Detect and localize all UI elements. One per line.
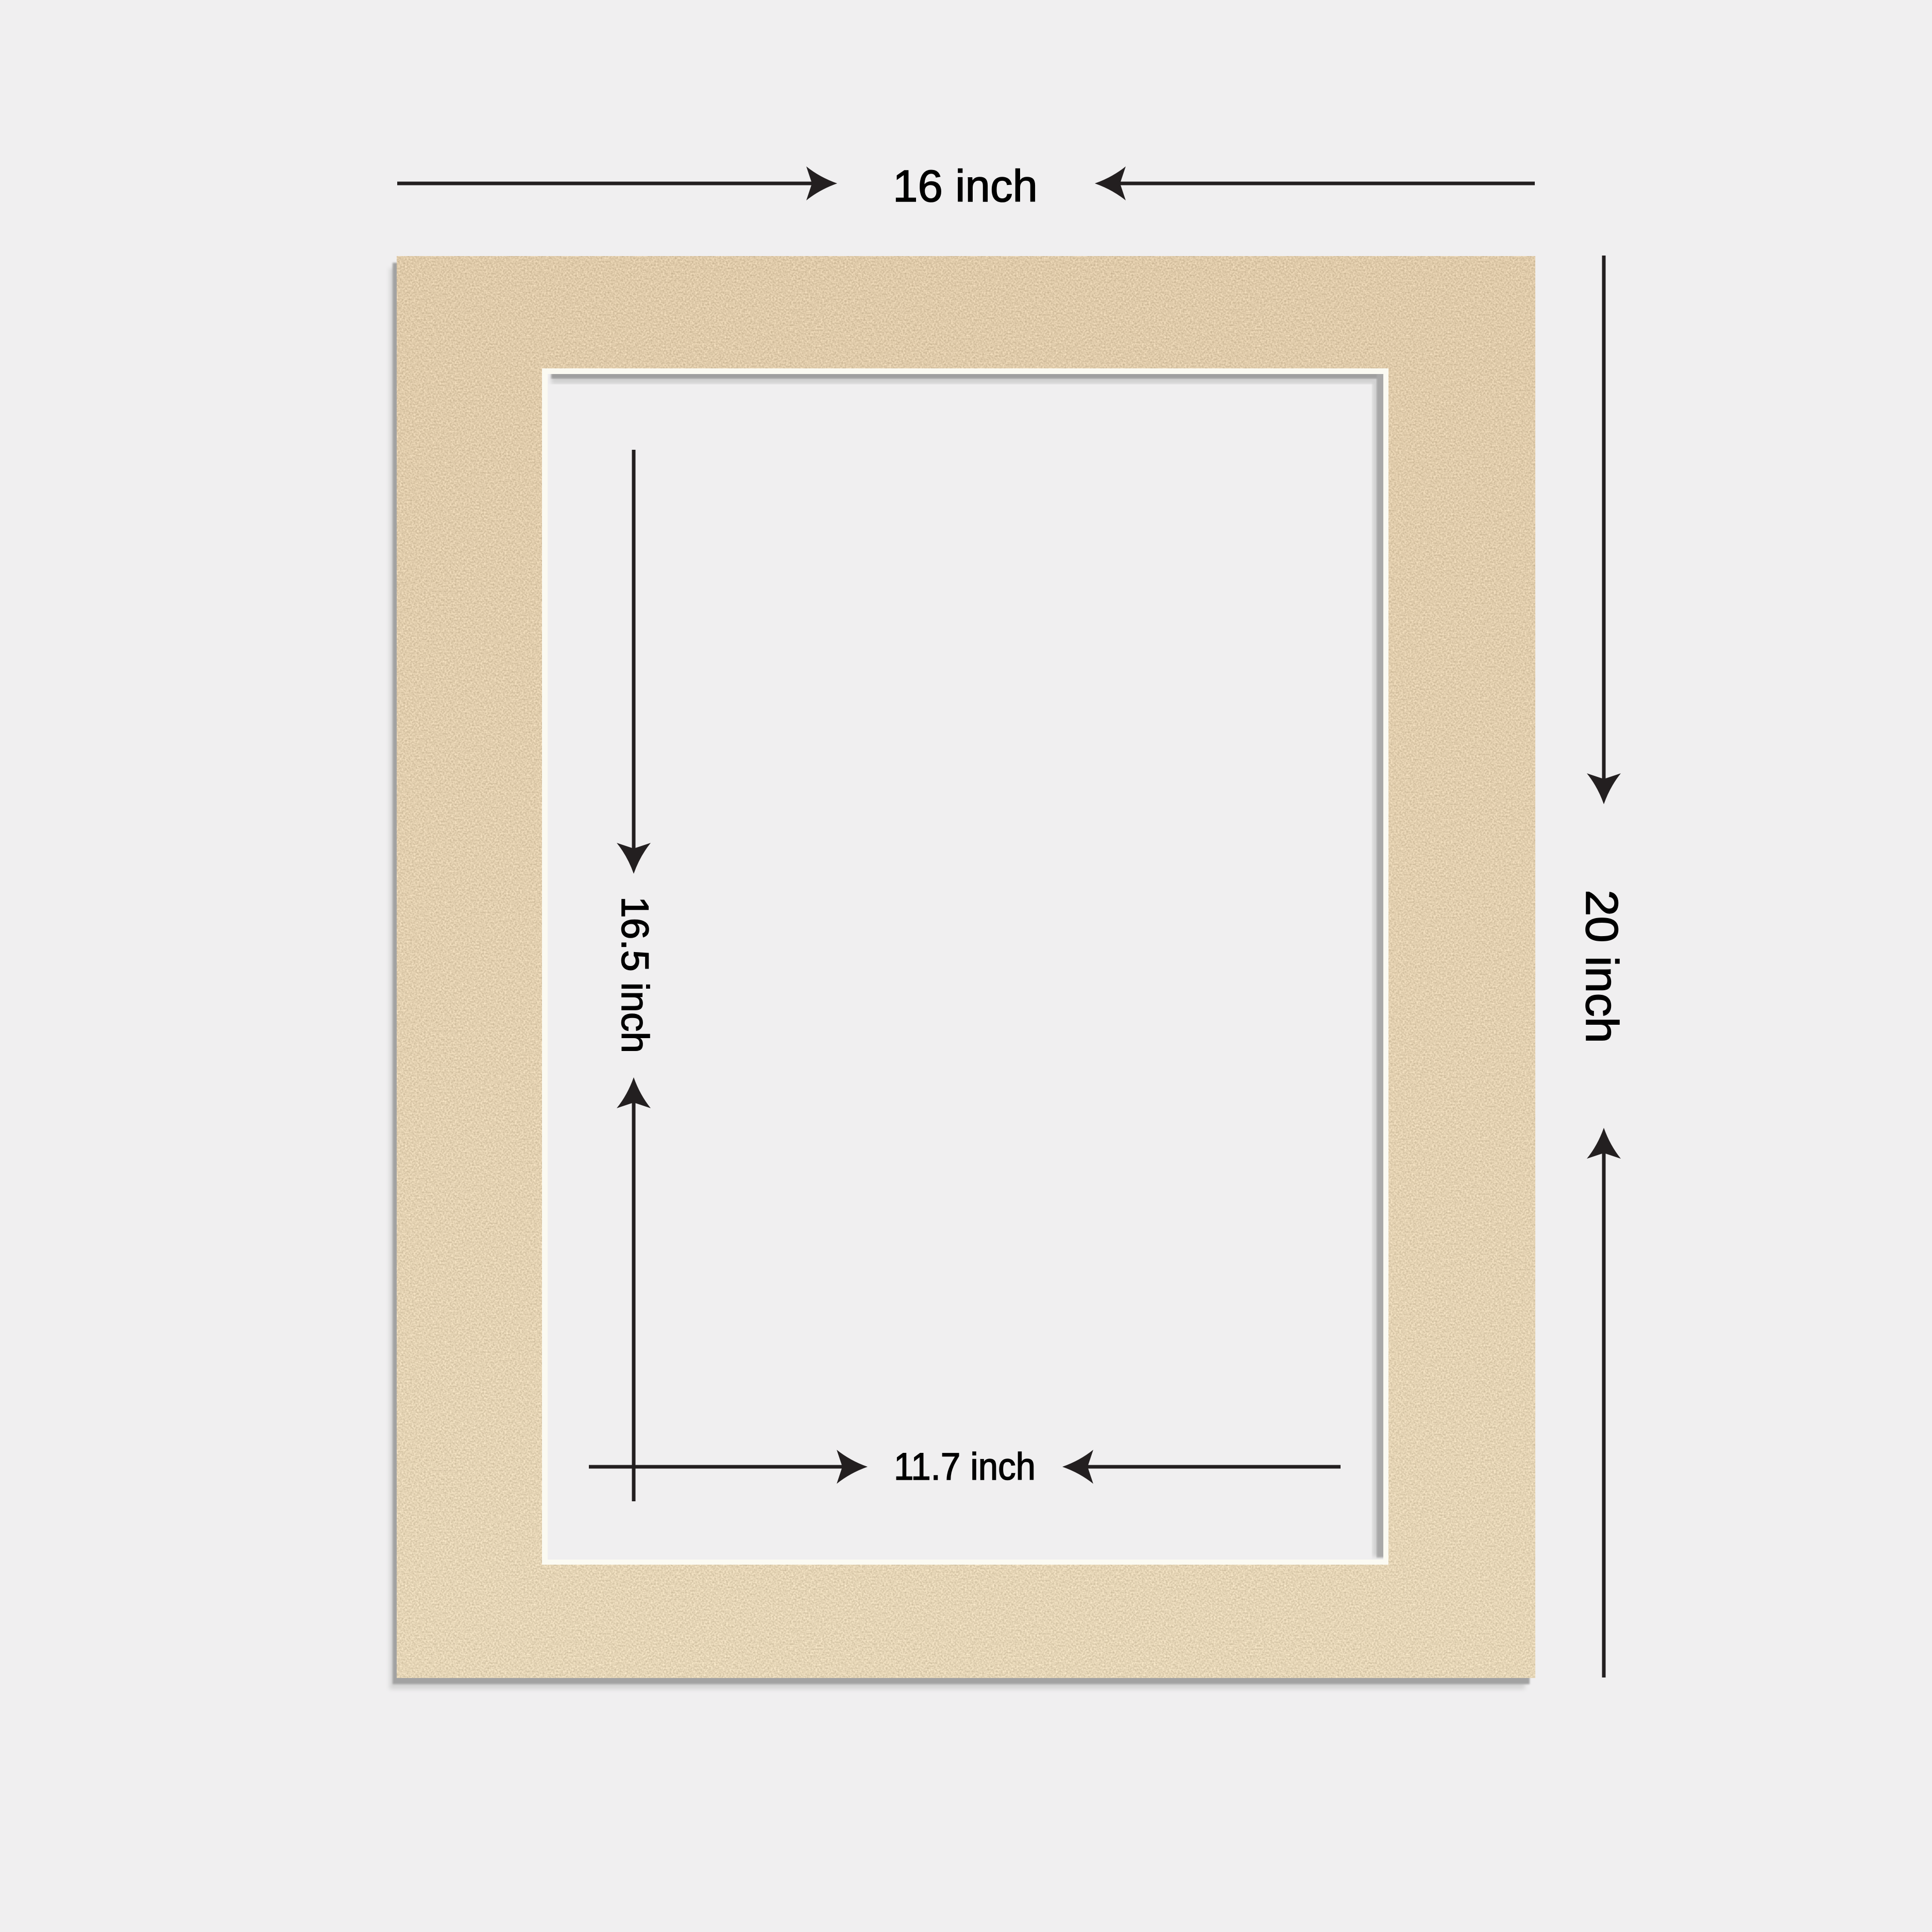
arrow: window width, right side <box>1062 1450 1341 1484</box>
mat board outer shadow <box>389 263 1530 1689</box>
label: 11.7 inch: 11.7 inch <box>894 1445 1036 1488</box>
inner window shadow <box>551 371 1386 1557</box>
label: 20 inch: 20 inch <box>1577 890 1628 1043</box>
arrow: window width, left side <box>589 1450 868 1484</box>
arrow: window height, bottom side <box>617 1077 651 1501</box>
arrow: window height, top side <box>617 450 651 874</box>
infographic canvas <box>388 166 1621 1690</box>
arrow: top width, right side <box>1095 166 1535 200</box>
arrow: right height, bottom side <box>1587 1128 1621 1677</box>
label: 16.5 inch: 16.5 inch <box>614 896 656 1053</box>
mat board frame <box>397 256 1535 1678</box>
white bevel edge <box>542 368 1388 1565</box>
label: 16 inch: 16 inch <box>893 161 1038 211</box>
arrow: right height, top side <box>1587 256 1621 804</box>
arrow: top width, left side <box>397 166 837 200</box>
